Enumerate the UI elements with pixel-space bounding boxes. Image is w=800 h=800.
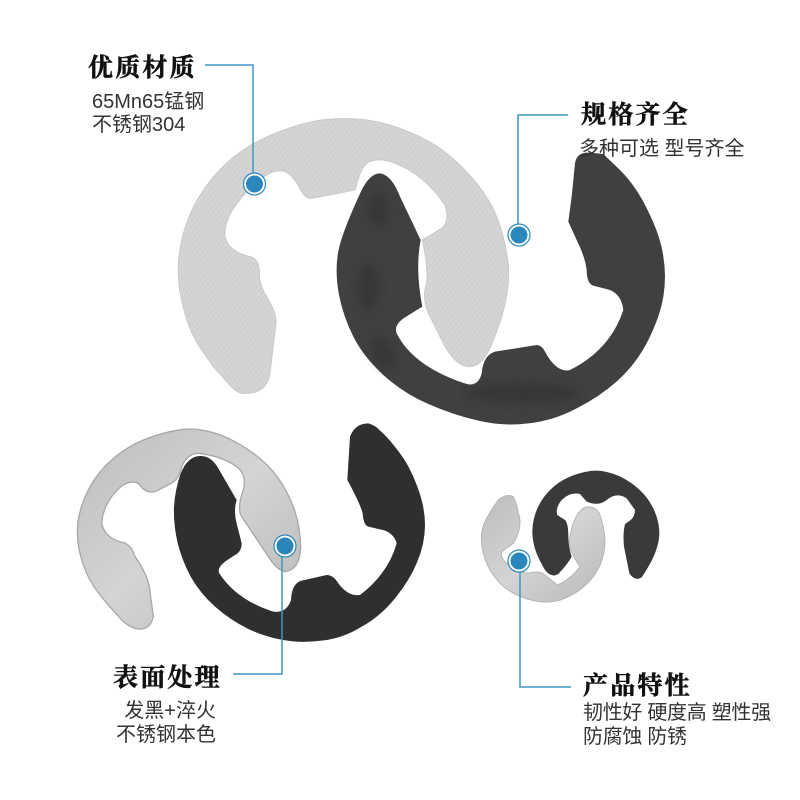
leader line [518, 115, 568, 232]
leader line [520, 570, 571, 687]
marker dot [508, 550, 530, 572]
heading: 产品特性 [583, 671, 692, 700]
dark mottling [358, 193, 580, 403]
black medium E-clip [174, 423, 425, 642]
callout: 表面处理 [113, 535, 296, 746]
heading: 表面处理 [113, 663, 222, 692]
lower rings: silver and black E-clips [77, 423, 425, 642]
description: 多种可选 型号齐全 [579, 137, 745, 160]
marker dot [508, 224, 530, 246]
marker dot [244, 173, 266, 195]
description [583, 701, 771, 748]
silver large E-clip [178, 118, 509, 393]
callout: 优质材质 [88, 54, 266, 195]
marker dot [274, 535, 296, 557]
description: 发黑+淬火 [124, 699, 216, 722]
callout: 产品特性 [508, 550, 771, 748]
leader line [233, 555, 282, 674]
silver small E-clip [481, 496, 605, 602]
description: 韧性好 硬度高 塑性强 [583, 701, 771, 724]
description: 不锈钢本色 [116, 723, 216, 746]
black large E-clip [337, 153, 665, 425]
description: 不锈钢304 [92, 113, 185, 136]
large rings: silver and black E-clips [178, 118, 665, 425]
silver medium E-clip [77, 429, 301, 629]
leader line [205, 65, 253, 184]
heading: 规格齐全 [581, 100, 690, 129]
black small E-clip [532, 471, 659, 579]
heading: 优质材质 [88, 54, 197, 82]
description [92, 90, 204, 136]
callout: 规格齐全 [508, 100, 745, 246]
description: 65Mn65锰钢 [92, 90, 204, 113]
description [116, 699, 216, 746]
small rings: silver and black E-clips [481, 471, 659, 602]
description: 防腐蚀 防锈 [583, 725, 687, 748]
